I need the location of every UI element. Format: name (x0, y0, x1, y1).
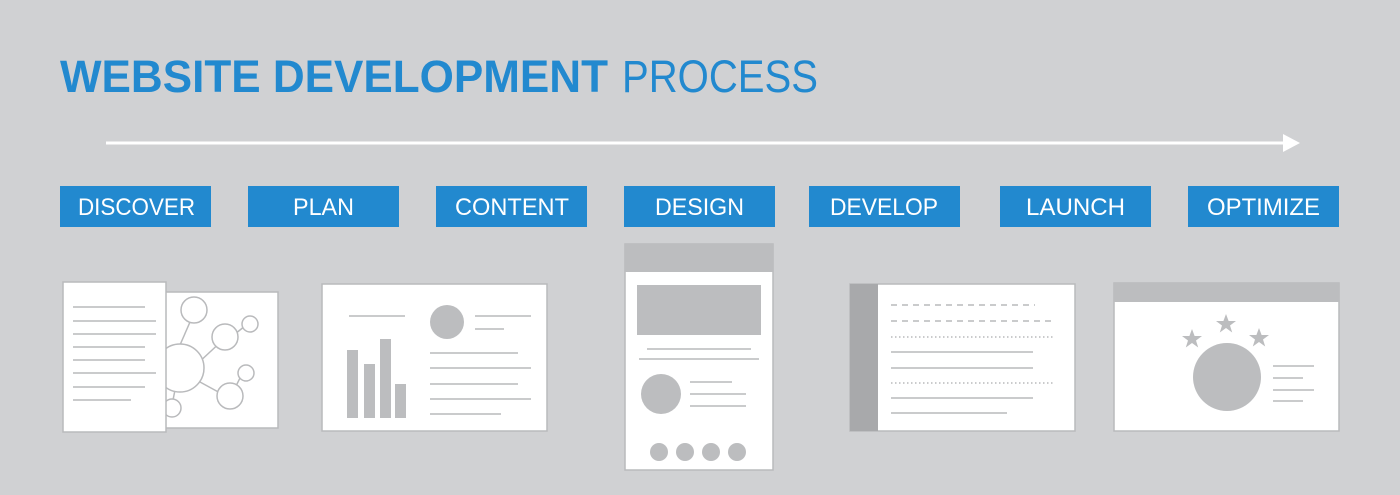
label: develop (809, 186, 960, 227)
label: optimize (1188, 186, 1339, 227)
label: develop: DEVELOP (830, 194, 938, 221)
label: launch: LAUNCH (1026, 194, 1125, 221)
label: content (436, 186, 587, 227)
label: design: DESIGN (655, 194, 744, 221)
panel: optimize illustration (1114, 283, 1339, 431)
label: optimize: OPTIMIZE (1207, 194, 1320, 221)
title: PROCESS (622, 51, 818, 102)
document sheet (63, 282, 166, 432)
mind map sheet (156, 292, 278, 428)
panel: plan illustration (322, 284, 547, 431)
label: discover: DISCOVER (78, 194, 195, 221)
label: plan (248, 186, 399, 227)
panel: develop illustration (850, 284, 1075, 431)
bar chart (347, 339, 406, 418)
panel: discover illustration (63, 282, 278, 432)
label: design (624, 186, 775, 227)
arrow: timeline (106, 134, 1300, 152)
icon: stars (1182, 314, 1269, 348)
label: content: CONTENT (455, 194, 569, 221)
panel: design illustration (625, 244, 773, 470)
label: plan: PLAN (293, 194, 354, 221)
title: WEBSITE DEVELOPMENT (60, 51, 608, 102)
step labels (60, 186, 1339, 227)
label: discover (60, 186, 211, 227)
label: launch (1000, 186, 1151, 227)
